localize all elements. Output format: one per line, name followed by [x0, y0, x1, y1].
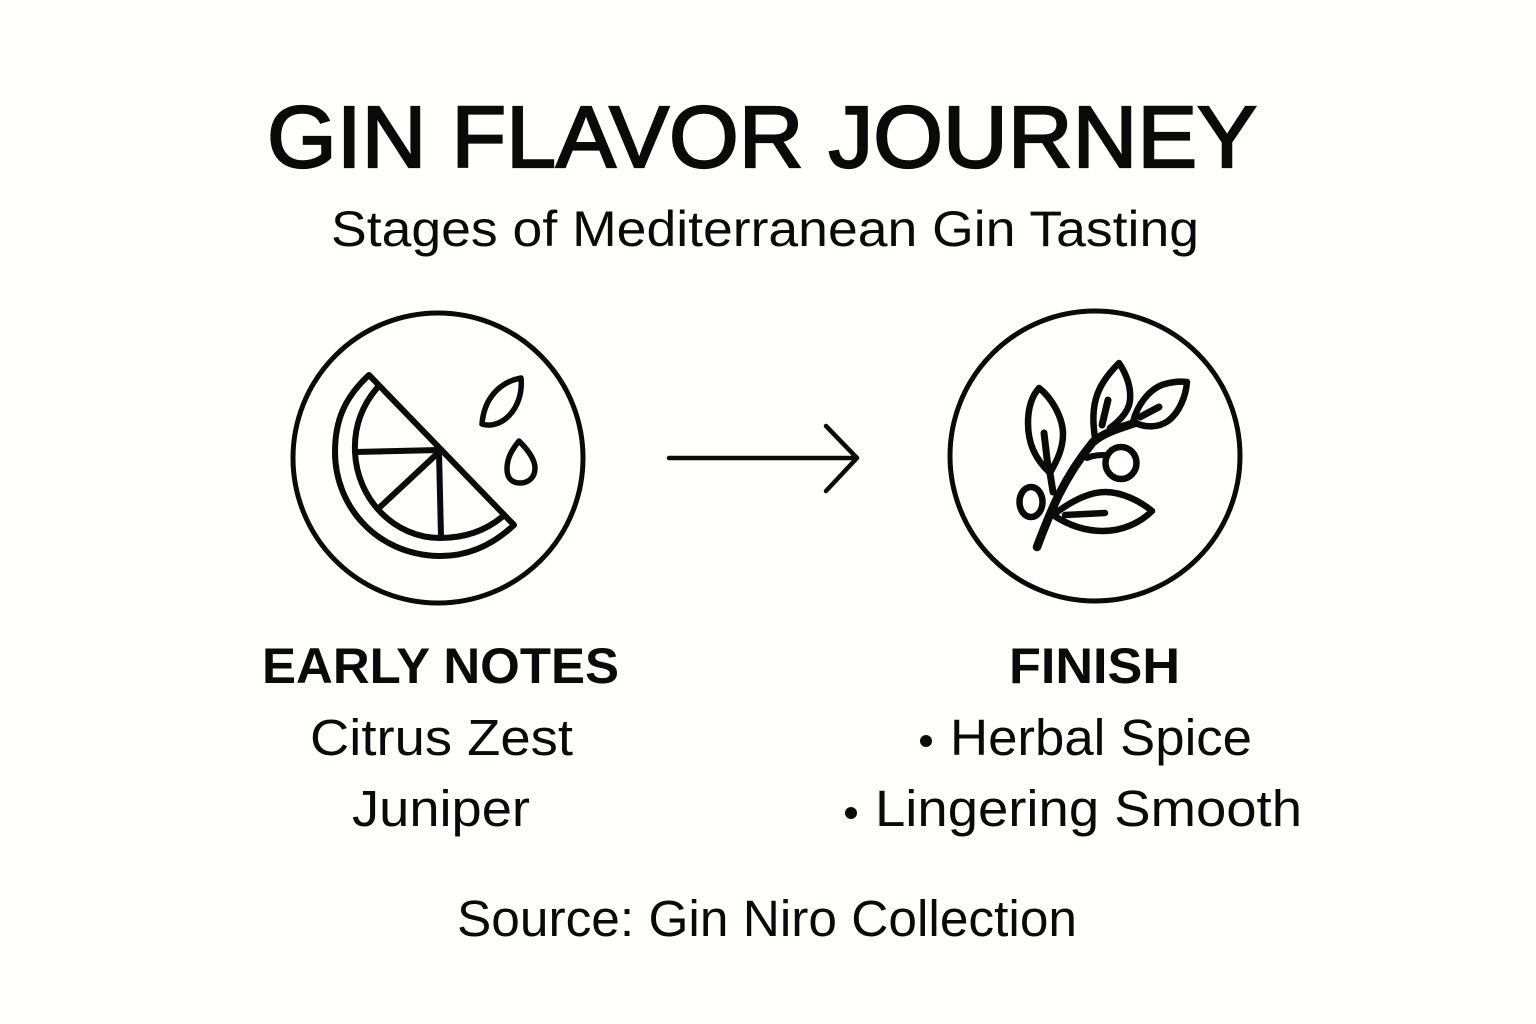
bullet: herbal spice	[920, 735, 932, 747]
arrow	[669, 426, 857, 491]
icon: citrus slice in circle	[293, 313, 583, 603]
subtitle: Stages of Mediterranean Gin Tasting	[331, 201, 1199, 257]
text: herbal spice: Herbal Spice	[950, 709, 1252, 766]
heading: early notes: EARLY NOTES	[262, 638, 619, 694]
bullet: lingering smooth	[845, 807, 857, 819]
source note: Source: Gin Niro Collection	[457, 890, 1077, 947]
icon: herb sprig in circle	[950, 311, 1240, 601]
text: lingering smooth: Lingering Smooth	[875, 780, 1302, 837]
heading: finish: FINISH	[1009, 638, 1180, 694]
title: GIN FLAVOR JOURNEY	[267, 89, 1257, 186]
text: citrus zest: Citrus Zest	[310, 709, 573, 766]
text: juniper: Juniper	[352, 780, 530, 837]
